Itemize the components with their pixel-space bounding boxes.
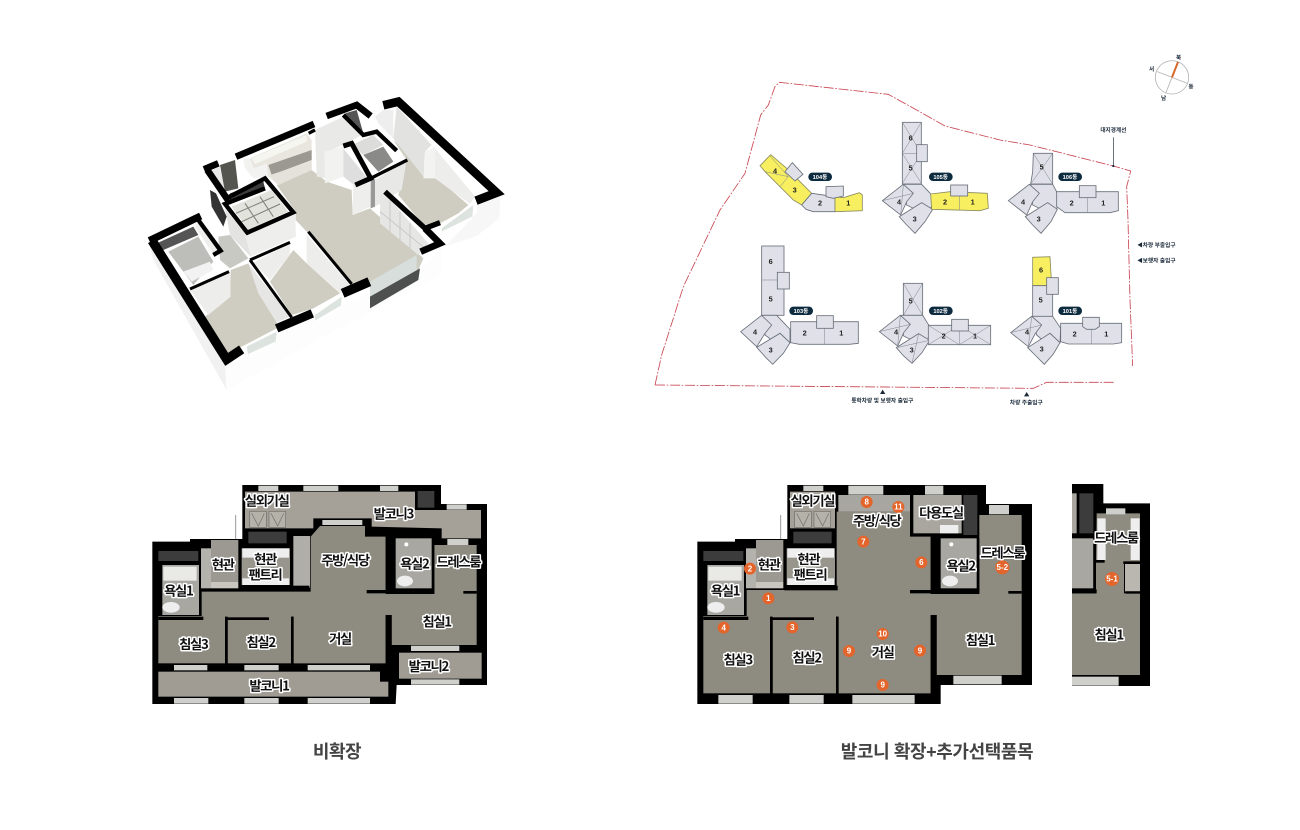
option number markers: 6 (919, 558, 924, 567)
room labels: 욕실1 (711, 581, 741, 600)
building 101: 5 (1039, 296, 1043, 305)
option number markers: 9 (847, 647, 852, 656)
option marker 5-1 (1105, 572, 1119, 586)
building 101 (1011, 257, 1122, 364)
option number markers: 1 (766, 594, 771, 603)
building 103: 5 (769, 294, 773, 303)
room labels: 침실1 (422, 612, 452, 631)
room labels: 침실1 (1094, 624, 1124, 643)
building 105: 3 (913, 214, 917, 223)
room labels: 침실3 (179, 634, 209, 653)
entry arrow (779, 515, 782, 539)
option number markers: 8 (864, 498, 869, 507)
building 101: 1 (1104, 329, 1108, 338)
room labels: 현관 (758, 555, 781, 574)
entrance (201, 540, 238, 588)
building 103: 103동 (794, 308, 808, 315)
3D isometric floor plan (148, 102, 501, 390)
building 103: 1 (839, 328, 843, 337)
building 104 (760, 155, 862, 212)
boundary label with leader (1100, 126, 1126, 167)
room labels: 침실1 (966, 630, 996, 649)
site boundary line (655, 82, 1133, 385)
building 104: 4 (773, 166, 778, 175)
floors (277, 170, 423, 285)
option marker 5-1: 5-1 (1106, 575, 1118, 584)
option number markers: 4 (721, 623, 726, 632)
kitchen counter (293, 536, 310, 588)
room labels (1094, 528, 1139, 643)
building 101: 4 (1025, 328, 1030, 337)
room labels: 실외기실 (790, 491, 835, 510)
closet shelves (1097, 518, 1140, 560)
option number markers: 2 (748, 564, 753, 573)
pantry (232, 190, 288, 230)
building 105 (882, 122, 988, 233)
building 103: 6 (769, 257, 773, 266)
bathroom 2 fixtures (941, 538, 977, 588)
option number markers (718, 496, 1009, 691)
building 106: 1 (1101, 198, 1105, 207)
room labels: 주방/식당 (321, 550, 370, 569)
building 103: 3 (769, 345, 773, 354)
pantry (787, 548, 835, 585)
building 101: 2 (1073, 329, 1077, 338)
building 105: 6 (909, 133, 913, 142)
room labels: 팬트리 (794, 564, 826, 583)
building 105: 5 (909, 163, 913, 172)
option number markers: 7 (861, 537, 866, 546)
room labels: 발코니2 (409, 656, 449, 675)
caption: balcony extension: 발코니 확장+추가선택품목 (841, 742, 1033, 762)
building 101: 6 (1039, 265, 1043, 274)
room labels: 실외기실 (245, 491, 290, 510)
bathroom 2 fixtures (396, 538, 432, 588)
building 102: 1 (973, 331, 977, 340)
room labels: 드레스룸 (1094, 528, 1139, 547)
pantry (242, 548, 290, 585)
room walls (190, 272, 231, 315)
building 106 (1008, 153, 1118, 233)
utility room (913, 495, 977, 535)
compass: 서 (1149, 65, 1154, 73)
floor plan: balcony extension (697, 485, 1032, 704)
windows (1072, 508, 1125, 686)
building 105: 4 (897, 198, 902, 207)
building 102: 102동 (933, 308, 948, 315)
building 105: 105동 (933, 174, 948, 181)
kitchen counter (838, 495, 910, 512)
windows (718, 486, 1009, 704)
room labels: 발코니1 (249, 675, 290, 694)
building 105: 1 (971, 197, 975, 206)
room labels: 주방/식당 (853, 511, 902, 530)
compass (1149, 54, 1194, 102)
building 106: 5 (1040, 162, 1044, 171)
building 104: 3 (793, 185, 797, 194)
main vehicle entrance label (1010, 392, 1043, 407)
building 106: 3 (1037, 214, 1041, 223)
room labels: 침실3 (723, 650, 753, 669)
compass: 북 (1176, 54, 1181, 62)
outdoor unit room (790, 492, 835, 543)
room labels: 욕실2 (400, 553, 430, 572)
entry arrow (234, 515, 237, 539)
windows (174, 486, 468, 704)
compass: 동 (1188, 83, 1194, 90)
option number markers: 10 (878, 630, 888, 639)
vehicle sub entrance label: ◀차량 부출입구 (1137, 241, 1176, 249)
school bus and pedestrian entrance label (851, 390, 913, 405)
building 105: 2 (943, 197, 947, 206)
building 104: 2 (818, 198, 822, 207)
building 106: 4 (1021, 198, 1026, 207)
room labels: 거실 (872, 642, 895, 661)
building 102 (879, 283, 991, 363)
caption: unextended: 비확장 (313, 742, 362, 762)
option number markers: 11 (894, 503, 903, 512)
building 102: 4 (894, 327, 899, 336)
right room walls (393, 107, 432, 177)
windows (370, 255, 417, 297)
bathroom 1 fixtures (703, 551, 744, 615)
room labels: 현관 (254, 549, 277, 568)
left bath (157, 227, 198, 250)
bathroom 1 fixtures (158, 551, 199, 615)
floor plan: alternate dressing room option (1072, 484, 1150, 686)
room labels: 침실2 (792, 647, 822, 666)
main floor (747, 512, 1022, 693)
compass: 남 (1161, 94, 1167, 102)
partition (380, 193, 428, 255)
main vehicle entrance label: 차량 주출입구 (1010, 399, 1043, 407)
option number markers: 5-2 (997, 563, 1009, 572)
room labels: 현관 (212, 555, 235, 574)
option number markers: 9 (918, 646, 923, 655)
building 104: 104동 (813, 174, 827, 181)
option number markers: 9 (880, 681, 885, 690)
room labels: 다용도실 (919, 502, 964, 521)
kitchen (250, 133, 312, 185)
building 103 (741, 246, 858, 364)
site plan with building blocks (655, 54, 1194, 407)
boundary label with leader: 대지경계선 (1100, 126, 1126, 134)
room labels (711, 491, 1025, 669)
building 106: 2 (1070, 198, 1074, 207)
room labels: 욕실2 (946, 556, 976, 575)
building 102: 2 (942, 331, 946, 340)
room labels: 침실2 (246, 632, 276, 651)
school bus and pedestrian entrance label: 통학차량 및 보행자 출입구 (851, 397, 913, 405)
room labels: 드레스룸 (980, 543, 1025, 562)
site boundary bottom (655, 382, 1115, 388)
building 103: 2 (803, 328, 807, 337)
building 101: 3 (1040, 344, 1044, 353)
building 102: 5 (909, 296, 913, 305)
room labels (164, 491, 481, 694)
pedestrian entrance label: ◀보행자 출입구 (1137, 257, 1176, 265)
building 104: 1 (846, 198, 850, 207)
option number markers: 3 (790, 623, 795, 632)
room labels: 팬트리 (249, 564, 281, 583)
entrance (746, 540, 783, 588)
building 106: 106동 (1063, 174, 1077, 181)
building 102: 3 (910, 345, 914, 354)
room labels: 발코니3 (374, 504, 414, 523)
main floor (202, 526, 477, 663)
center walls (315, 117, 362, 178)
building 103: 4 (753, 327, 758, 336)
floor plan: unextended (152, 485, 487, 704)
balcony 3 and outdoor unit room (245, 491, 481, 543)
room labels: 욕실1 (164, 581, 194, 600)
room labels: 현관 (797, 549, 820, 568)
building 101: 101동 (1063, 308, 1077, 315)
room labels: 드레스룸 (436, 552, 481, 571)
room labels: 거실 (329, 629, 352, 648)
